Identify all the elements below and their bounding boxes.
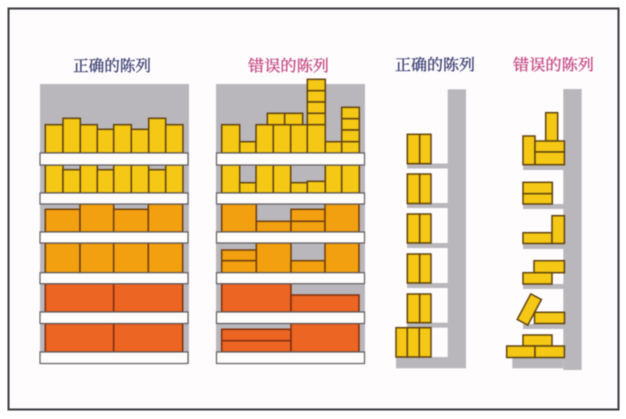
- shelf boards: [216, 153, 364, 364]
- row 6 uneven red boxes: [222, 324, 359, 352]
- row 5 uneven red boxes: [222, 284, 359, 312]
- box group 1: [523, 113, 564, 165]
- row 3 orange boxes: [45, 204, 183, 232]
- box group 3: [523, 216, 564, 244]
- row 6 red boxes: [45, 324, 183, 352]
- box group 6: [507, 335, 564, 358]
- row 1 yellow boxes: [45, 118, 183, 153]
- title: incorrect display, front view: 错误的陈列: [248, 57, 329, 75]
- row 4 uneven orange boxes: [222, 243, 359, 273]
- box stacks: [396, 134, 431, 357]
- panel: incorrect side shelf: [507, 89, 582, 370]
- title: incorrect display, side view: 错误的陈列: [513, 56, 594, 74]
- box group 2: [523, 182, 552, 204]
- shelf upright: [563, 89, 582, 370]
- shelf boards: [40, 153, 188, 364]
- title: correct display, side view: 正确的陈列: [395, 56, 475, 74]
- row 4 orange boxes: [45, 243, 183, 273]
- title: correct display, front view: 正确的陈列: [73, 57, 151, 75]
- row 1 uneven yellow boxes: [222, 79, 359, 153]
- row 2 uneven yellow boxes: [222, 165, 359, 193]
- row 5 red boxes: [45, 284, 183, 312]
- box group 5 with tilted box: [517, 294, 564, 325]
- row 3 uneven orange boxes: [222, 204, 359, 232]
- shelf ledges: [396, 164, 448, 368]
- panel: correct side shelf: [396, 89, 466, 368]
- shelf upright: [448, 89, 466, 368]
- box group 4: [523, 261, 564, 284]
- shelf ledges: [512, 165, 564, 368]
- row 2 yellow boxes: [45, 165, 183, 193]
- panel: correct front shelf: [40, 84, 189, 364]
- panel: incorrect front shelf: [216, 79, 365, 364]
